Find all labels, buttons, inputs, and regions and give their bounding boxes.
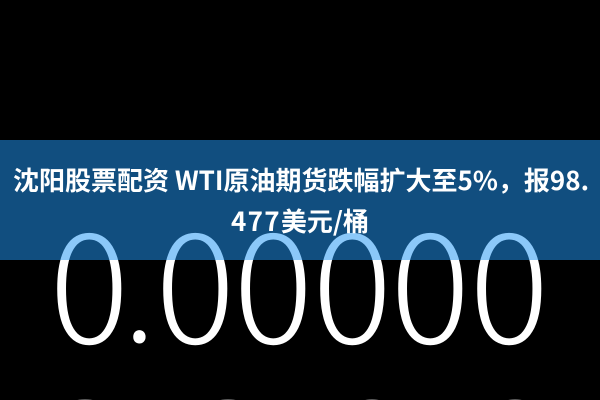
large number background: 0 (388, 167, 472, 390)
large number background: 0 (310, 167, 394, 390)
semi-transparent blue band (0, 140, 600, 260)
large number background: 0 (232, 167, 315, 390)
next row of digits peeking at the bottom edge (77, 399, 522, 400)
large number background: 0 (468, 167, 551, 390)
large number background: 0 (154, 167, 237, 390)
large number background: . (118, 168, 161, 390)
title line 2: 477美元/桶 (231, 202, 369, 239)
title line 1: 沈阳股票配资 WTI原油期货跌幅扩大至5%，报98. (13, 161, 589, 198)
large number background: 0 (48, 167, 131, 390)
